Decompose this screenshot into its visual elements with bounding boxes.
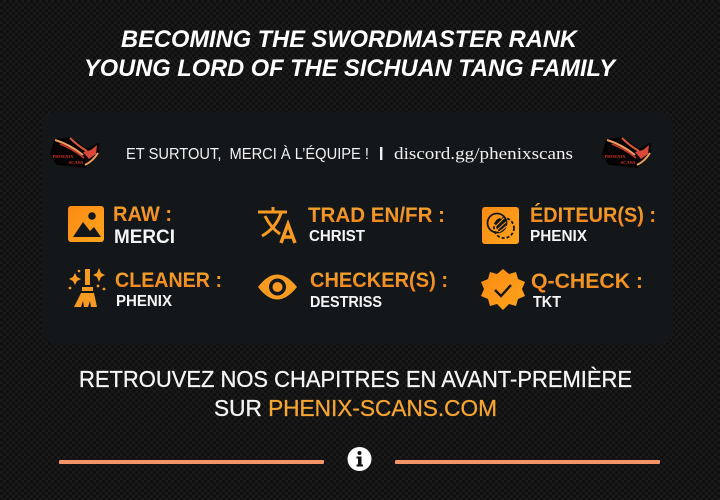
credit: cleaner: PHENIX (116, 293, 172, 310)
credit: q-check: TKT (533, 294, 561, 311)
discord link: discord.gg/phenixscans (394, 144, 573, 163)
credit: raw (68, 203, 175, 248)
credit: checker: DESTRISS (310, 294, 382, 311)
credit: checker (258, 269, 448, 311)
title (84, 26, 618, 82)
credit: trad: CHRIST (309, 228, 365, 245)
promo text: RETROUVEZ NOS CHAPITRES EN AVANT-PREMIÈRE (79, 366, 632, 392)
icon: phenix logo right (603, 138, 650, 167)
icon: phenix logo left (51, 138, 98, 167)
promo text: SUR PHENIX-SCANS.COM (214, 395, 497, 421)
credit: checker: CHECKER(S) : (310, 269, 448, 292)
credit: editeur (482, 204, 656, 245)
icon: broom (69, 268, 105, 307)
divider right (395, 460, 660, 464)
separator bar (380, 147, 382, 160)
credit: editeur: PHENIX (530, 228, 587, 245)
credit: cleaner: CLEANER : (115, 269, 222, 292)
icon: phenix logo left: PHOENIX (52, 154, 74, 159)
icon: phenix logo right: PHOENIX (604, 154, 626, 159)
icon: verified badge (481, 269, 525, 310)
title: BECOMING THE SWORDMASTER RANK (121, 26, 579, 53)
promo text (79, 366, 632, 421)
icon: translate (258, 207, 295, 243)
credit: cleaner (69, 268, 222, 310)
panel: team credits (42, 112, 673, 344)
credit: q-check (481, 269, 643, 311)
credit: raw: RAW : (113, 203, 172, 226)
credit: editeur: ÉDITEUR(S) : (530, 204, 656, 227)
credit: raw: MERCI (114, 226, 175, 248)
credit: q-check: Q-CHECK : (531, 270, 643, 293)
icon: info (348, 447, 372, 471)
credit: trad: TRAD EN/FR : (308, 204, 445, 227)
divider left (59, 460, 324, 464)
title: YOUNG LORD OF THE SICHUAN TANG FAMILY (84, 55, 618, 82)
icon: image (68, 206, 104, 242)
icon: editor (482, 207, 519, 244)
icon: phenix logo right: SCANS (621, 160, 636, 165)
team thanks text: ET SURTOUT, MERCI À L’ÉQUIPE ! (126, 144, 369, 163)
icon: eye (258, 274, 297, 300)
icon: phenix logo left: SCANS (69, 160, 84, 165)
credit: trad (258, 204, 445, 245)
